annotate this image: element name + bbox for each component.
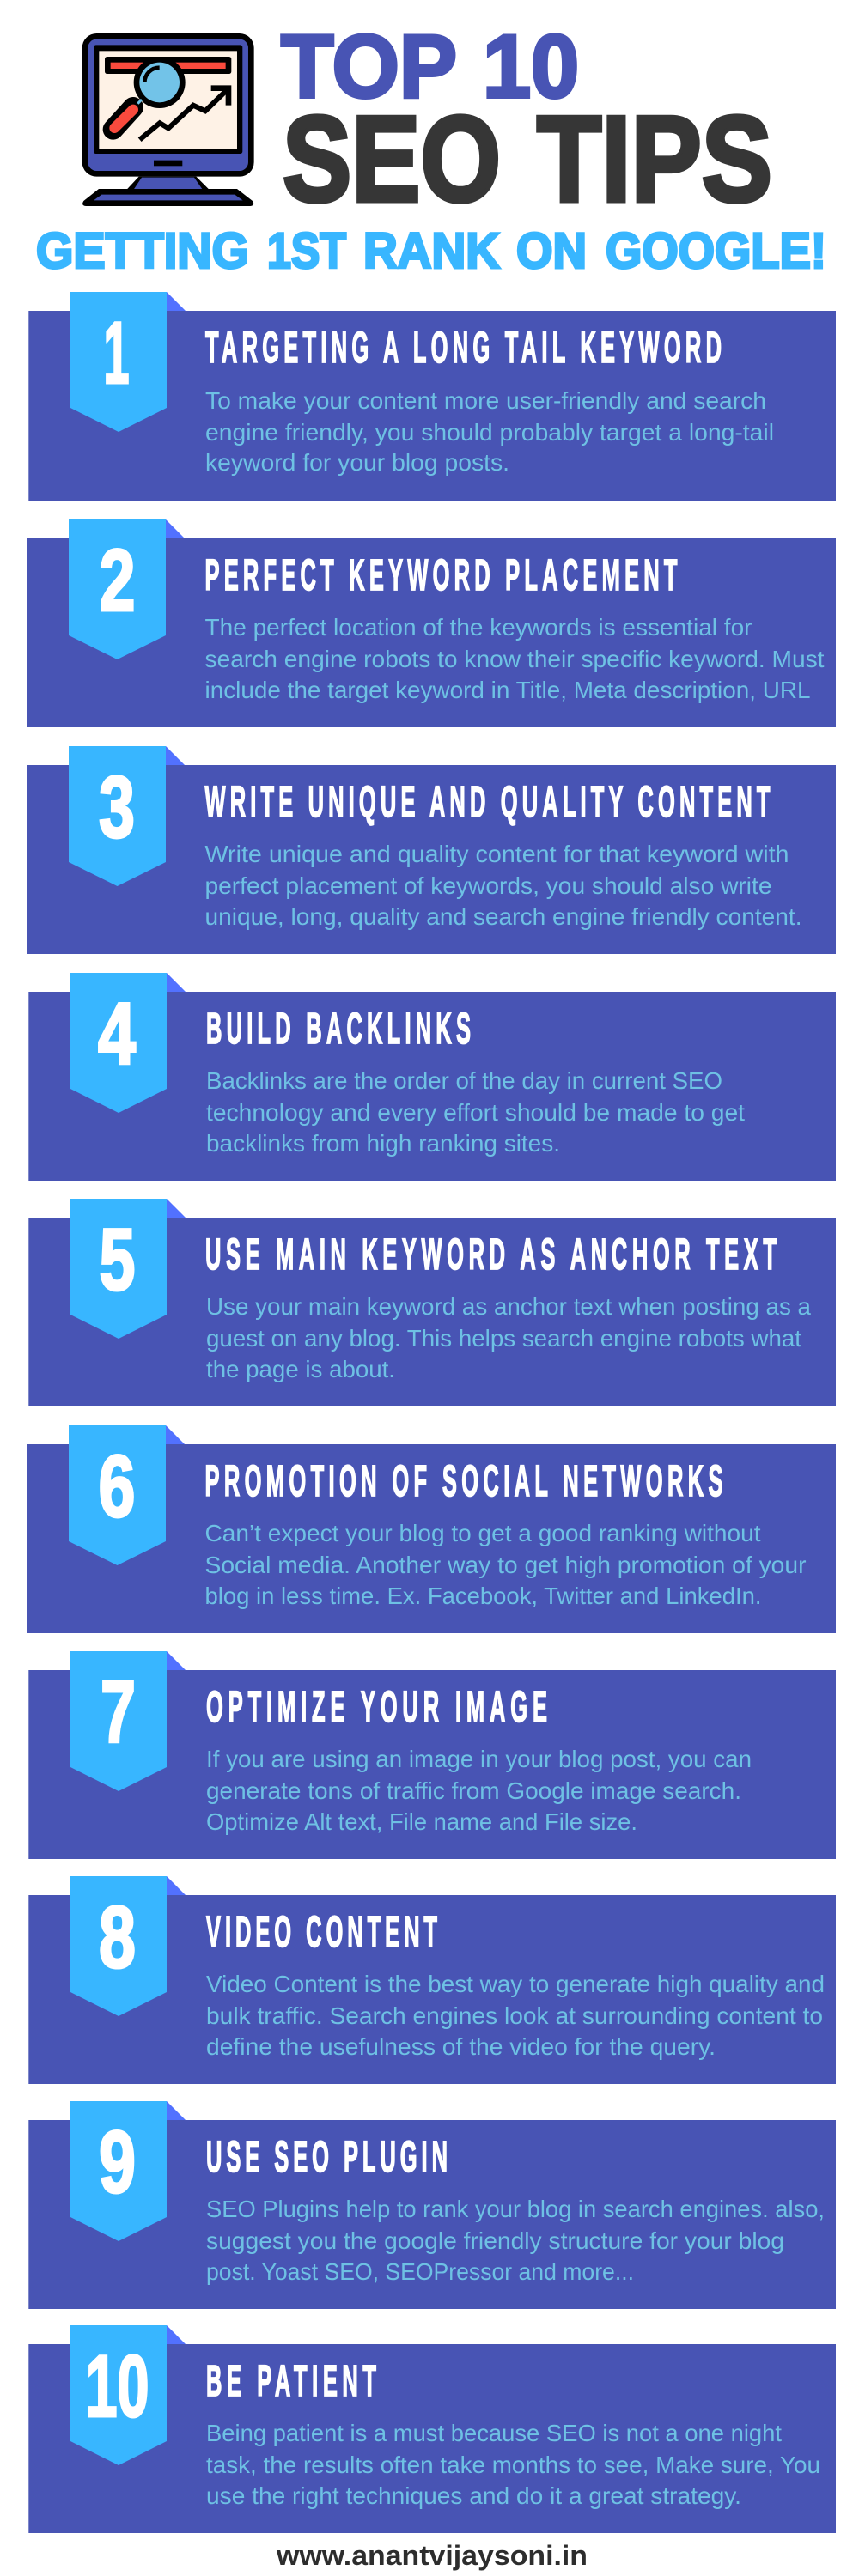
- panel: tip 7: OPTIMIZE YOUR IMAGE: [206, 1682, 547, 1731]
- panel: tip 6: blog in less time. Ex. Facebook, Twitter and LinkedIn.: [204, 1583, 761, 1609]
- panel: tip 1: To make your content more user-friendly and search: [205, 387, 766, 414]
- subtitle: [36, 223, 826, 279]
- panel: tip 9: suggest you the google friendly structure for your blog: [206, 2227, 784, 2254]
- panel: tip 9: post. Yoast SEO, SEOPressor and more...: [206, 2258, 634, 2285]
- panel: tip 1: keyword for your blog posts.: [205, 449, 509, 476]
- panel: tip 4: backlinks from high ranking sites.: [206, 1130, 560, 1157]
- panel: tip 7: Optimize Alt text, File name and File size.: [206, 1808, 637, 1835]
- footer website: www.anantvijaysoni.in: [276, 2540, 588, 2571]
- title: top 10: 10: [483, 17, 579, 117]
- panel: tip 6: Social media. Another way to get high promotion of your: [204, 1552, 806, 1578]
- panel: tip 7: [28, 1651, 836, 1859]
- panel: tip 8: define the usefulness of the video for the query.: [206, 2033, 716, 2060]
- panel: tip 1: 1: [103, 304, 129, 402]
- panel: tip 10: Being patient is a must because SEO is not a one night: [206, 2420, 782, 2446]
- panel: tip 10: BE PATIENT: [206, 2356, 376, 2405]
- panel: tip 9: [28, 2101, 836, 2309]
- panel: tip 2: 2: [100, 532, 136, 629]
- subtitle: RANK: [363, 223, 500, 279]
- panel: tip 4: BUILD BACKLINKS: [206, 1004, 471, 1053]
- title: seo tips: TIPS: [537, 91, 772, 228]
- panel: tip 4: technology and every effort should be made to get: [206, 1099, 745, 1126]
- panel: tip 4: Backlinks are the order of the day in current SEO: [206, 1067, 722, 1094]
- subtitle: GETTING: [36, 223, 249, 279]
- title: top 10: [281, 17, 579, 117]
- title: seo tips: SEO: [283, 91, 501, 228]
- panel: tip 5: USE MAIN KEYWORD AS ANCHOR TEXT: [205, 1230, 777, 1279]
- panel: tip 3: 3: [99, 758, 135, 856]
- panel: tip 8: 8: [99, 1888, 136, 1986]
- panel: tip 2: search engine robots to know their specific keyword. Must: [204, 646, 825, 672]
- panel: tip 10: task, the results often take months to see, Make sure, You: [206, 2451, 820, 2478]
- panel: tip 8: [28, 1876, 836, 2084]
- panel: tip 2: include the target keyword in Title, Meta description, URL: [204, 677, 811, 703]
- panel: tip 4: 4: [98, 985, 136, 1083]
- panel: tip 1: [28, 292, 836, 501]
- panel: tip 10: 10: [86, 2337, 149, 2435]
- panel: tip 2: [27, 519, 836, 727]
- subtitle: 1ST: [267, 223, 346, 279]
- panel: tip 8: bulk traffic. Search engines look at surrounding content to: [206, 2002, 823, 2029]
- panel: tip 3: [27, 746, 836, 954]
- panel: tip 5: guest on any blog. This helps search engine robots what: [206, 1325, 801, 1352]
- panel: tip 2: PERFECT KEYWORD PLACEMENT: [204, 550, 678, 599]
- panel: tip 5: 5: [100, 1211, 136, 1309]
- panel: tip 6: 6: [98, 1437, 136, 1535]
- panel: tip 10: use the right techniques and do it a great strategy.: [206, 2482, 741, 2509]
- panel: tip 3: unique, long, quality and search engine friendly content.: [204, 903, 802, 930]
- panel: tip 10: [28, 2325, 836, 2533]
- panel: tip 9: SEO Plugins help to rank your blog in search engines. also,: [206, 2196, 825, 2222]
- panel: tip 9: USE SEO PLUGIN: [206, 2132, 448, 2181]
- title: top 10: TOP: [281, 17, 457, 117]
- panel: tip 1: engine friendly, you should probably target a long-tail: [205, 419, 774, 446]
- panel: tip 6: [27, 1425, 836, 1633]
- panel: tip 5: the page is about.: [206, 1356, 395, 1382]
- panel: tip 3: WRITE UNIQUE AND QUALITY CONTENT: [204, 777, 771, 826]
- subtitle: ON: [516, 223, 587, 279]
- panel: tip 6: Can’t expect your blog to get a good ranking without: [204, 1520, 761, 1546]
- icon: computer monitor with magnifier and growth arrow: [82, 33, 254, 206]
- panel: tip 5: [28, 1199, 836, 1406]
- panel: tip 5: Use your main keyword as anchor text when posting as a: [206, 1293, 811, 1320]
- subtitle: GOOGLE!: [606, 223, 826, 279]
- panel: tip 3: perfect placement of keywords, you should also write: [204, 872, 771, 899]
- panel: tip 8: Video Content is the best way to generate high quality and: [206, 1971, 825, 1997]
- title: seo tips: [283, 91, 772, 228]
- panel: tip 7: generate tons of traffic from Google image search.: [206, 1777, 741, 1804]
- panel: tip 7: 7: [101, 1663, 136, 1761]
- panel: tip 4: [28, 973, 836, 1181]
- panel: tip 8: VIDEO CONTENT: [206, 1907, 437, 1956]
- panel: tip 7: If you are using an image in your blog post, you can: [206, 1746, 752, 1772]
- panel: tip 3: Write unique and quality content for that keyword with: [204, 841, 789, 867]
- panel: tip 6: PROMOTION OF SOCIAL NETWORKS: [204, 1456, 722, 1505]
- panel: tip 2: The perfect location of the keywords is essential for: [204, 614, 752, 641]
- panel: tip 1: TARGETING A LONG TAIL KEYWORD: [205, 323, 722, 372]
- panel: tip 9: 9: [99, 2113, 136, 2211]
